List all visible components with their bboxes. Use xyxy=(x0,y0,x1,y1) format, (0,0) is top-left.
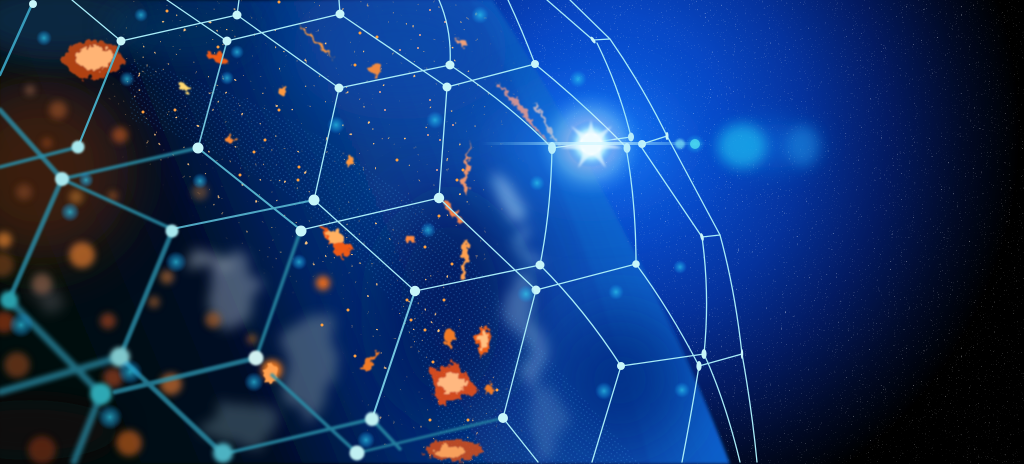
network lines: mid and near xyxy=(0,0,757,462)
city lights large clusters xyxy=(63,22,560,461)
network nodes xyxy=(0,0,743,463)
city lights small points xyxy=(143,2,497,420)
lens glow behind flare xyxy=(500,95,820,195)
starfield xyxy=(480,0,1024,464)
speckled city lights xyxy=(100,0,530,464)
planet earth disc xyxy=(0,0,730,464)
network lines: far, blurred xyxy=(0,110,503,462)
dotted mesh overlay xyxy=(130,60,640,464)
earth tones and clouds xyxy=(0,0,690,464)
blue bokeh dots xyxy=(8,6,690,449)
lens flare xyxy=(480,89,819,199)
clouds xyxy=(36,178,559,456)
blurred bokeh orange lights xyxy=(0,85,330,464)
